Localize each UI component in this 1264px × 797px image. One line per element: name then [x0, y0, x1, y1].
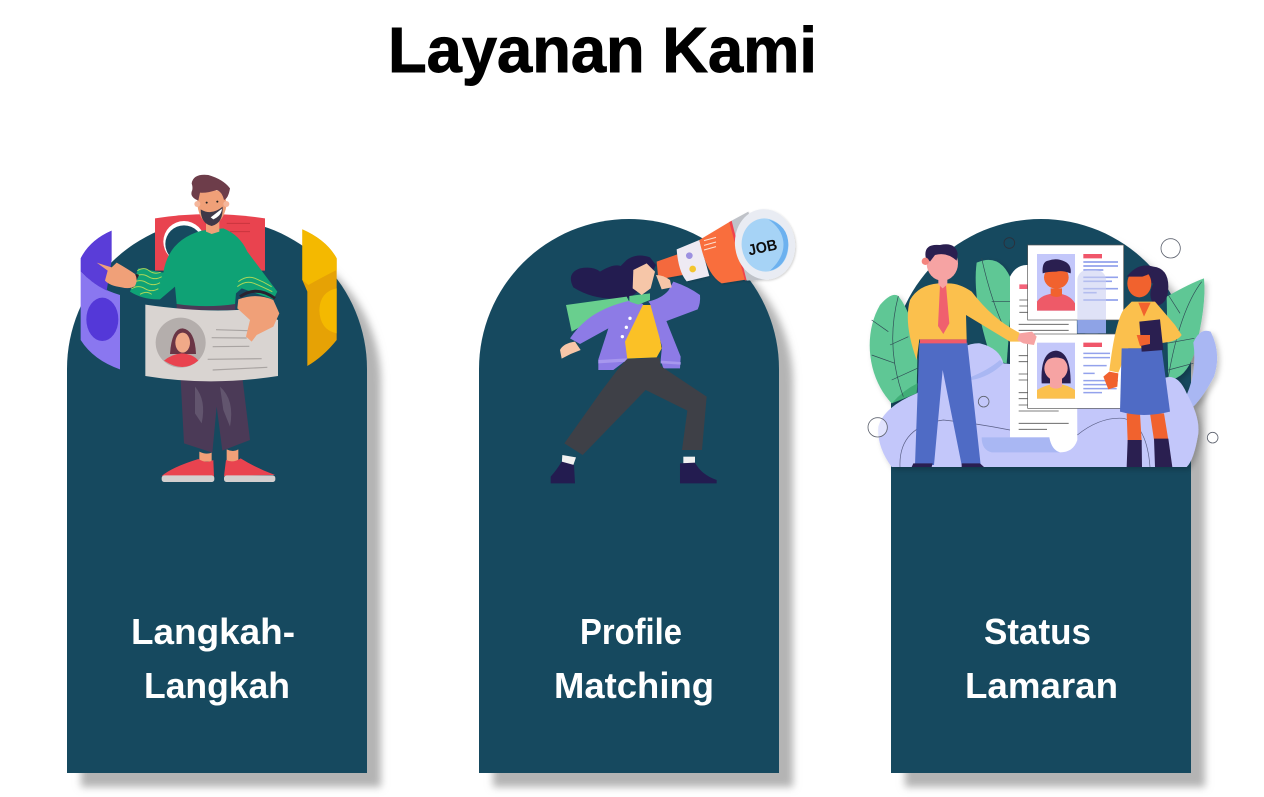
red back panel	[155, 214, 265, 271]
green collar	[629, 293, 650, 305]
legs	[181, 380, 250, 453]
icon: two recruiters with CVs	[868, 238, 1218, 467]
panel: Status Lamaran	[868, 219, 1218, 787]
panel: Langkah-Langkah	[67, 175, 381, 787]
label: Status Lamaran: Status	[984, 611, 1091, 652]
hand	[560, 342, 581, 359]
scarf	[566, 297, 630, 332]
CV card top	[1028, 245, 1124, 333]
telescope	[657, 205, 800, 283]
ankles	[199, 449, 238, 462]
head	[633, 263, 655, 295]
telescope: JOB	[747, 237, 779, 259]
blob outlines	[900, 418, 1150, 467]
title: Layanan Kami	[388, 14, 817, 86]
right arm in jacket	[648, 282, 700, 322]
yellow side panel	[302, 229, 337, 366]
neck and head	[191, 175, 230, 234]
profile card	[145, 305, 278, 381]
holding hand	[237, 296, 279, 342]
trousers	[564, 357, 707, 455]
striped cuffs	[132, 269, 272, 294]
pointing hand	[97, 263, 137, 288]
woman	[1103, 266, 1182, 467]
panel: Profile Matching	[479, 205, 800, 787]
label: Profile Matching: Matching	[554, 665, 714, 706]
label: Langkah-Langkah	[131, 611, 295, 706]
label: Langkah-Langkah: Langkah-	[131, 611, 295, 652]
label: Profile Matching: Profile	[580, 611, 682, 652]
CV card bottom	[1028, 334, 1124, 408]
purple side panel	[81, 231, 120, 369]
long document	[982, 265, 1077, 452]
belt	[177, 303, 235, 310]
label: Status Lamaran	[965, 611, 1118, 706]
label: Profile Matching	[554, 611, 714, 706]
shoes	[162, 458, 275, 482]
jacket	[570, 301, 681, 370]
hair	[571, 256, 656, 299]
man	[908, 244, 1037, 467]
label: Status Lamaran: Lamaran	[965, 665, 1118, 706]
socks and shoes	[551, 455, 717, 483]
background plants and blob	[870, 258, 1217, 467]
green sweater	[130, 228, 277, 306]
decorative circles	[868, 238, 1218, 443]
icon: man holding profile card	[81, 175, 337, 482]
yellow top	[624, 305, 662, 359]
label: Langkah-Langkah: Langkah	[144, 665, 290, 706]
icon: woman with job telescope	[551, 205, 800, 483]
